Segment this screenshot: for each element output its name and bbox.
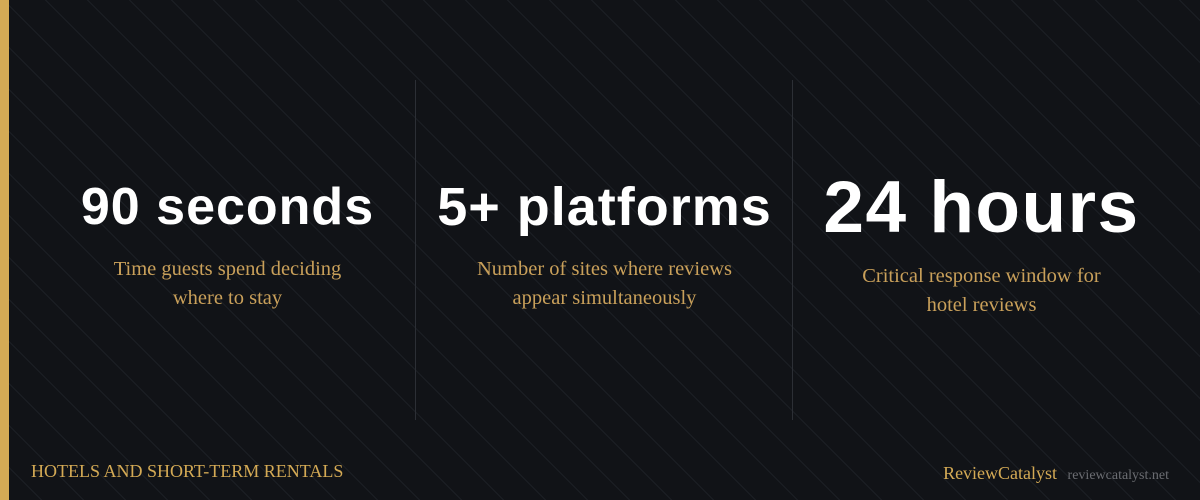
stat description	[477, 258, 732, 309]
stat description	[862, 265, 1101, 316]
stat description: hotel reviews	[927, 294, 1036, 316]
stat description: where to stay	[173, 287, 282, 309]
stat panel: 24 hours	[823, 167, 1140, 316]
stat panel: 5+ platforms	[437, 177, 772, 309]
stat number: 24 hours	[823, 167, 1140, 248]
stat number: 5+ platforms	[437, 177, 772, 237]
stat description: Time guests spend deciding	[114, 258, 341, 280]
stat description: Number of sites where reviews	[477, 258, 732, 280]
footer category: HOTELS AND SHORT-TERM RENTALS	[31, 461, 343, 481]
stat panel: 90 seconds	[81, 178, 374, 309]
stat description: Critical response window for	[862, 265, 1101, 287]
stat description: appear simultaneously	[513, 287, 696, 309]
accent bar	[0, 0, 9, 500]
footer brand: ReviewCatalyst reviewcatalyst.net	[943, 463, 1169, 483]
stat number: 90 seconds	[81, 178, 374, 236]
stat description	[114, 258, 341, 309]
